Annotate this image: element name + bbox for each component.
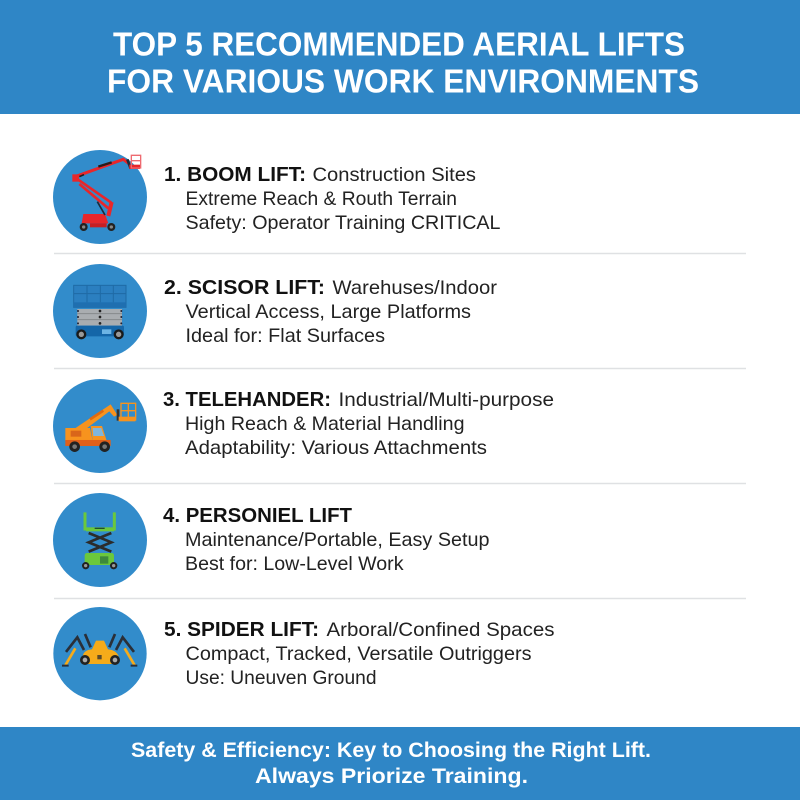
header banner xyxy=(0,0,800,114)
footer text: Always Priorize Training. xyxy=(255,764,528,788)
text: personnel lift: Maintenance/Portable, Easy Setup xyxy=(185,529,490,551)
text: boom lift: 1. BOOM LIFT: xyxy=(164,164,306,186)
text: telehandler: Industrial/Multi-purpose xyxy=(338,389,554,411)
text: telehandler: Adaptability: Various Attachments xyxy=(185,437,487,459)
text: personnel lift xyxy=(163,505,490,575)
text: boom lift: Construction Sites xyxy=(312,164,476,186)
text: scissor lift: 2. SCISOR LIFT: xyxy=(164,277,325,299)
text: boom lift xyxy=(164,164,501,234)
footer text xyxy=(131,738,651,788)
icon: boom lift xyxy=(53,150,147,244)
text: spider lift: 5. SPIDER LIFT: xyxy=(164,619,319,641)
icon: personnel lift xyxy=(53,493,147,587)
text: scissor lift: Ideal for: Flat Surfaces xyxy=(186,325,385,347)
panel: boom lift xyxy=(53,150,501,244)
footer banner xyxy=(0,727,800,800)
text: personnel lift: Best for: Low-Level Work xyxy=(185,553,404,575)
text: telehandler: High Reach & Material Handling xyxy=(185,413,464,435)
panel: spider lift xyxy=(53,607,555,700)
title xyxy=(107,26,699,100)
text: telehandler: 3. TELEHANDER: xyxy=(163,389,331,411)
text: personnel lift: 4. PERSONIEL LIFT xyxy=(163,505,352,527)
text: scissor lift: Warehuses/Indoor xyxy=(332,277,498,299)
icon: spider lift xyxy=(53,607,147,700)
title: TOP 5 RECOMMENDED AERIAL LIFTS xyxy=(113,26,685,62)
title: FOR VARIOUS WORK ENVIRONMENTS xyxy=(107,62,699,100)
panel: telehandler xyxy=(53,379,554,473)
icon: telehandler xyxy=(53,379,147,473)
text: spider lift xyxy=(164,619,555,689)
text: scissor lift: Vertical Access, Large Platforms xyxy=(186,301,471,323)
text: spider lift: Use: Uneuven Ground xyxy=(186,667,376,689)
text: spider lift: Arboral/Confined Spaces xyxy=(326,619,555,641)
panel: personnel lift xyxy=(53,493,490,587)
text: boom lift: Extreme Reach & Routh Terrain xyxy=(186,188,457,210)
text: boom lift: Safety: Operator Training CRITICAL xyxy=(186,212,501,234)
panel: scissor lift xyxy=(53,264,498,358)
text: spider lift: Compact, Tracked, Versatile Outriggers xyxy=(186,643,532,665)
footer text: Safety & Efficiency: Key to Choosing the Right Lift. xyxy=(131,738,651,762)
text: telehandler xyxy=(163,389,554,459)
icon: scissor lift xyxy=(53,264,147,358)
text: scissor lift xyxy=(164,277,498,347)
